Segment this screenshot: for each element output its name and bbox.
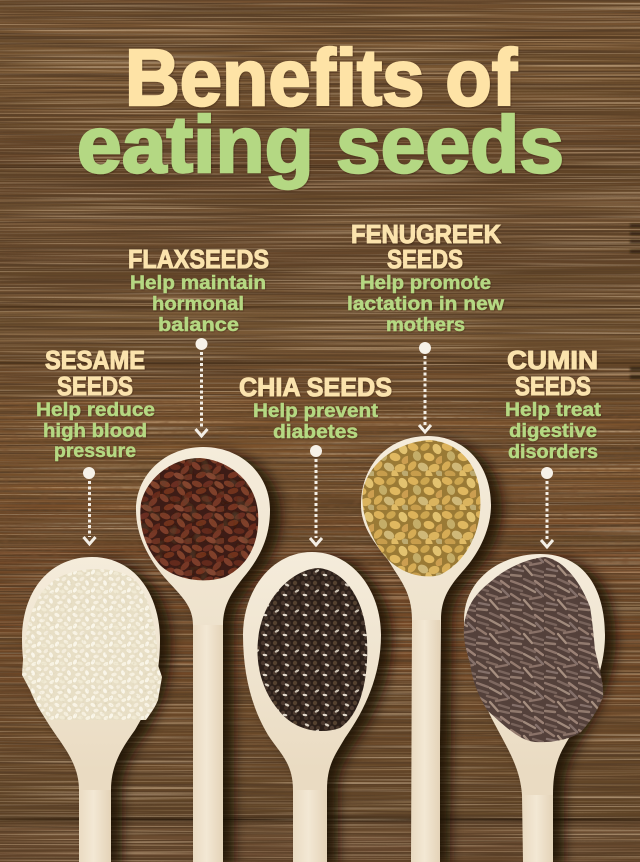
label: cumin seeds: disorders [508, 442, 598, 463]
arrow: chia seeds [310, 445, 322, 545]
title: Benefits of [125, 33, 517, 122]
label: flaxseeds: balance [158, 315, 239, 336]
label: flaxseeds: Help maintain [130, 273, 266, 294]
label: flaxseeds [128, 244, 269, 336]
spoon: fenugreek seeds [361, 436, 491, 862]
label: fenugreek seeds [347, 219, 504, 336]
label: fenugreek seeds: lactation in new [347, 294, 504, 315]
label: chia seeds [239, 372, 392, 443]
label: flaxseeds: FLAXSEEDS [128, 244, 269, 274]
arrow: fenugreek seeds [419, 342, 431, 432]
label: cumin seeds: digestive [509, 421, 597, 442]
label: sesame seeds: SESAME [45, 345, 145, 375]
title [77, 33, 564, 189]
arrow: cumin seeds [541, 467, 553, 547]
spoon shadows [33, 440, 616, 862]
label: chia seeds: Help prevent [253, 401, 379, 422]
label: sesame seeds: Help reduce [36, 400, 155, 421]
label: sesame seeds: SEEDS [57, 371, 133, 401]
arrow: flaxseeds [196, 338, 208, 436]
spoon: chia seeds [243, 552, 381, 862]
arrow: sesame seeds [83, 467, 96, 544]
label: cumin seeds: Help treat [505, 400, 602, 421]
label: sesame seeds: pressure [54, 441, 136, 462]
spoon: cumin seeds [464, 554, 605, 862]
label: cumin seeds: SEEDS [515, 371, 591, 401]
spoon: flaxseeds [136, 447, 270, 862]
label: fenugreek seeds: mothers [386, 315, 465, 336]
label: fenugreek seeds: Help promote [360, 273, 491, 294]
title: eating seeds [77, 100, 564, 189]
label: cumin seeds [505, 345, 602, 463]
label: chia seeds: diabetes [273, 422, 358, 443]
label: flaxseeds: hormonal [152, 294, 244, 315]
label: sesame seeds [36, 345, 155, 462]
label: cumin seeds: CUMIN [507, 345, 598, 375]
label: fenugreek seeds: SEEDS [387, 244, 463, 274]
label: fenugreek seeds: FENUGREEK [351, 219, 501, 249]
spoon: sesame seeds [22, 557, 162, 862]
label: chia seeds: CHIA SEEDS [239, 372, 392, 402]
label: sesame seeds: high blood [43, 421, 147, 442]
